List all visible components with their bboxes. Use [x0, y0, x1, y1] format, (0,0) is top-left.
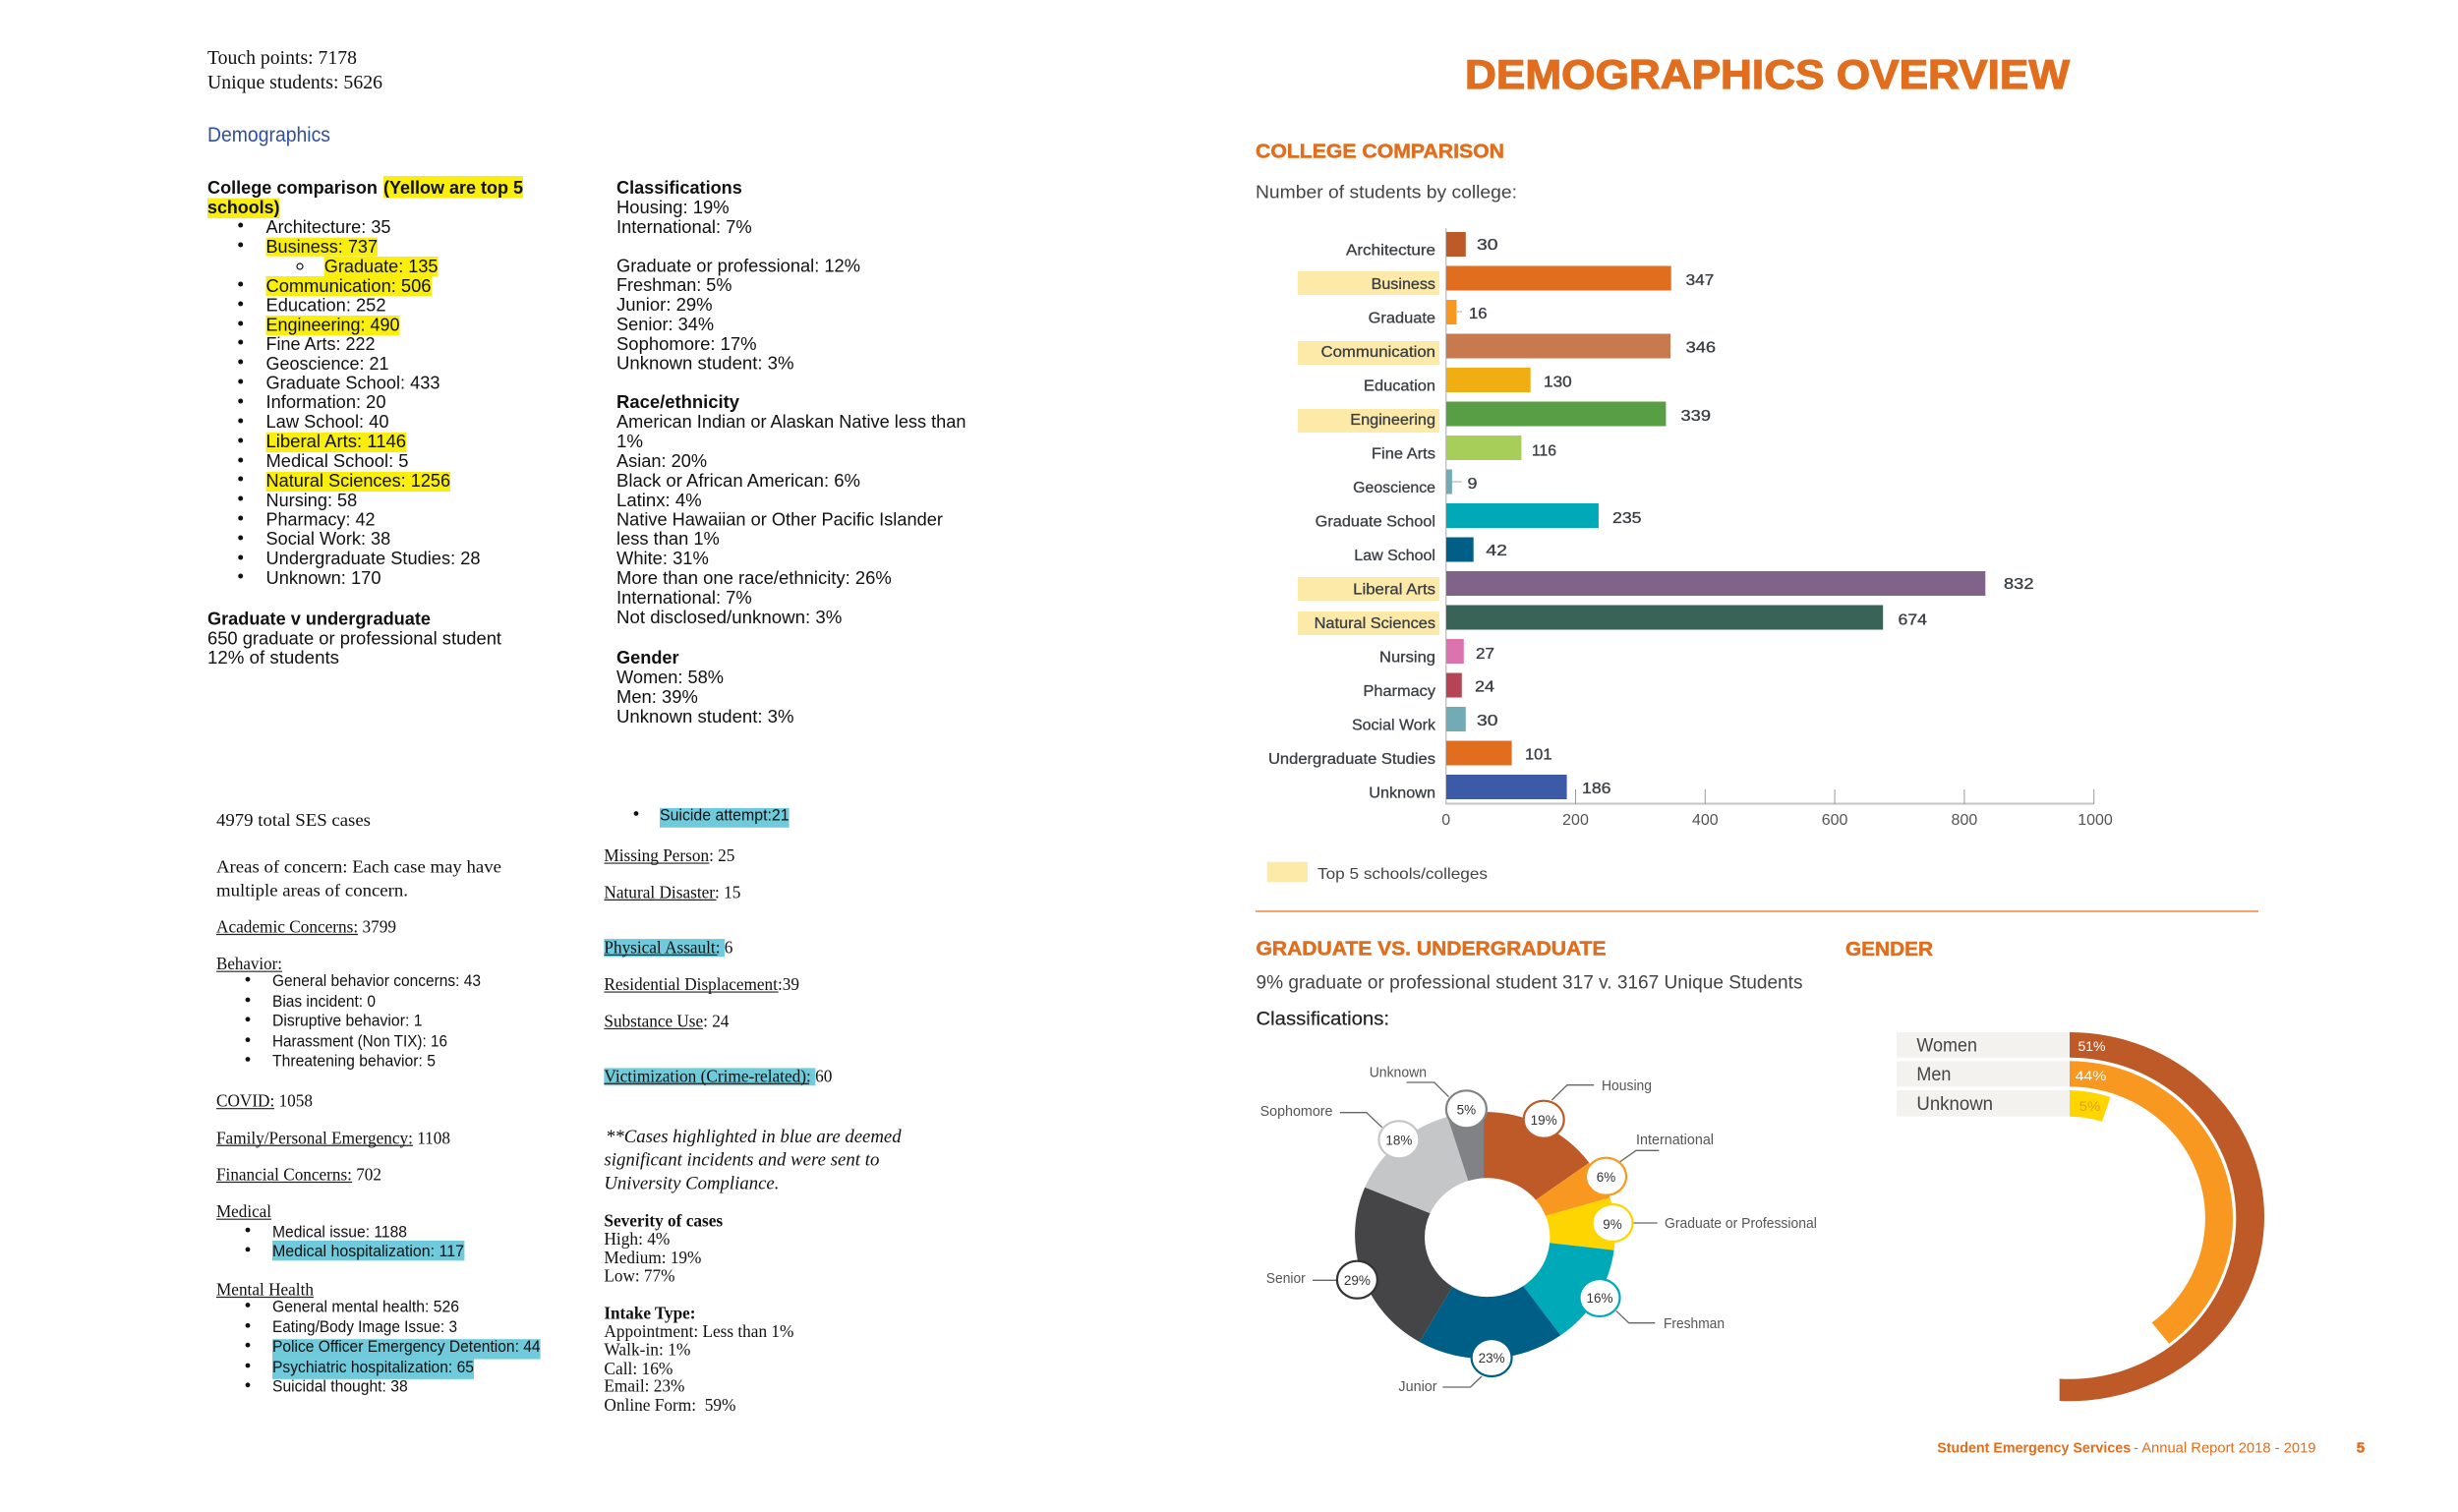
category labels: Pharmacy — [1363, 683, 1435, 700]
value labels: 674 — [1898, 612, 1927, 629]
panel: SES cases left column: Disruptive behavior: 1 — [272, 1012, 423, 1030]
text block: graduate v undergraduate: Graduate v undergraduate — [207, 610, 431, 629]
value labels: 16 — [1469, 306, 1488, 322]
percentage values: 23% — [1479, 1351, 1505, 1366]
percentage values: 18% — [1385, 1133, 1412, 1148]
slice labels: Graduate or Professional — [1665, 1216, 1817, 1232]
category labels: Graduate — [1369, 311, 1435, 326]
panel: SES cases right column: Substance Use: 24 — [604, 1012, 729, 1030]
row labels: Women — [1916, 1036, 1977, 1056]
panel: college comparison notes: Unknown: 170 — [265, 568, 381, 588]
text block: classifications: Sophomore: 17% — [616, 334, 757, 354]
panel: SES cases left column: Behavior: — [216, 954, 282, 973]
panel: college comparison notes: (Yellow are top 5 — [383, 178, 523, 198]
panel: SES cases left column: COVID: 1058 — [216, 1091, 313, 1111]
category labels: Natural Sciences — [1315, 615, 1435, 632]
slice labels: Unknown — [1370, 1066, 1427, 1081]
panel: SES cases right column: Residential Displacement:39 — [604, 974, 799, 994]
text block: classifications: International: 7% — [616, 217, 752, 237]
value labels: 235 — [1612, 510, 1642, 527]
axis tick labels: 600 — [1822, 812, 1848, 829]
text block: gender notes: Unknown student: 3% — [616, 707, 794, 727]
panel: SES cases left column: Financial Concerns: 702 — [216, 1165, 381, 1184]
panel: SES cases right column: Low: 77% — [604, 1265, 674, 1285]
axis tick labels: 200 — [1562, 812, 1589, 829]
subheading: number of students: Number of students by college: — [1256, 183, 1517, 203]
category labels: Architecture — [1346, 242, 1435, 260]
axis tick labels: 400 — [1692, 812, 1719, 829]
donut chart: classifications — [1260, 1066, 1817, 1395]
axis tick labels — [1441, 812, 2113, 829]
category labels: Undergraduate Studies — [1268, 751, 1435, 768]
text block: race and ethnicity: Black or African American: 6% — [616, 471, 860, 491]
text block: classifications: Junior: 29% — [616, 295, 713, 315]
panel: SES cases right column: Call: 16% — [604, 1359, 673, 1378]
footer: - Annual Report 2018 - 2019 — [2134, 1439, 2316, 1457]
panel: college comparison notes: Architecture: 35 — [265, 217, 391, 237]
panel: SES cases right column: Walk-in: 1% — [604, 1340, 690, 1360]
footer — [1937, 1439, 2365, 1457]
panel: college comparison notes: Graduate: 135 — [324, 257, 438, 276]
text block: classifications: Unknown student: 3% — [616, 354, 794, 374]
heading: graduate vs undergraduate: GRADUATE VS. UNDERGRADUATE — [1257, 939, 1607, 960]
text block: race and ethnicity: less than 1% — [616, 529, 720, 549]
category labels: Social Work — [1352, 718, 1435, 733]
panel: SES cases right column: Suicide attempt:21 — [660, 806, 790, 824]
value labels: 130 — [1544, 375, 1572, 391]
panel: college comparison notes: Pharmacy: 42 — [265, 509, 376, 529]
category labels: Education — [1364, 378, 1435, 395]
text block: race and ethnicity: International: 7% — [616, 588, 752, 608]
panel: SES cases left column: Suicidal thought: 38 — [272, 1377, 408, 1396]
panel: SES cases right column: Email: 23% — [604, 1376, 684, 1396]
panel: SES cases left column — [216, 810, 541, 1396]
bar chart: students by college — [1268, 228, 2113, 829]
panel: SES cases right column: University Compliance. — [604, 1173, 779, 1193]
leader lines — [1313, 1082, 1659, 1387]
text block: classifications — [616, 178, 860, 374]
panel: SES cases left column: Bias incident: 0 — [272, 992, 376, 1011]
category labels: Liberal Arts — [1353, 582, 1435, 598]
value labels: 30 — [1477, 713, 1498, 729]
category labels: Business — [1372, 276, 1435, 293]
value labels: 101 — [1525, 747, 1552, 764]
panel: college comparison notes: Undergraduate Studies: 28 — [265, 549, 480, 568]
percentage values — [1344, 1103, 1622, 1366]
text block: race and ethnicity: Race/ethnicity — [616, 392, 739, 412]
text block: classifications: Classifications — [616, 178, 742, 198]
value labels: 347 — [1686, 272, 1714, 289]
panel: college comparison notes: Nursing: 58 — [265, 491, 357, 510]
panel: totals: Unique students: 5626 — [207, 72, 382, 93]
panel: SES cases left column: Medical issue: 1188 — [272, 1223, 407, 1242]
row percentages — [2076, 1038, 2106, 1114]
panel: SES cases left column: Harassment (Non TIX): 16 — [272, 1032, 447, 1051]
value labels: 116 — [1532, 443, 1556, 460]
text block: race and ethnicity: Not disclosed/unknown: 3% — [616, 608, 842, 627]
panel: SES cases left column: 4979 total SES cases — [216, 810, 371, 830]
slice labels: Sophomore — [1260, 1104, 1333, 1120]
category labels: Graduate School — [1316, 513, 1435, 531]
panel: college comparison notes: College comparison — [207, 178, 378, 198]
arc: women — [2060, 1032, 2264, 1401]
row percentages: 44% — [2076, 1068, 2106, 1083]
percentage values: 9% — [1603, 1217, 1622, 1232]
panel: SES cases left column: Threatening behavior: 5 — [272, 1051, 436, 1070]
panel: SES cases left column: multiple areas of concern. — [216, 880, 408, 900]
row labels: Men — [1916, 1065, 1951, 1085]
panel: college comparison notes: Education: 252 — [265, 295, 385, 315]
value labels: 186 — [1582, 781, 1611, 797]
axis tick labels: 800 — [1952, 812, 1977, 829]
percentage bubbles — [1337, 1090, 1632, 1376]
text block: race and ethnicity: Native Hawaiian or Other Pacific Islander — [616, 509, 943, 529]
category labels: Law School — [1354, 548, 1435, 564]
text block: race and ethnicity: Latinx: 4% — [616, 491, 702, 510]
category labels: Unknown — [1369, 785, 1435, 802]
value labels: 9 — [1467, 476, 1478, 493]
value labels: 346 — [1686, 340, 1716, 357]
value labels: 30 — [1477, 237, 1498, 254]
text block: classifications: Senior: 34% — [616, 315, 714, 334]
panel: SES cases left column: Mental Health — [216, 1280, 314, 1300]
panel: SES cases left column: Family/Personal Emergency: 1108 — [216, 1128, 450, 1147]
heading: Demographics: Demographics — [207, 124, 330, 146]
text block: gender notes: Women: 58% — [616, 668, 724, 687]
heading: gender: GENDER — [1845, 939, 1934, 960]
panel: college comparison notes: Graduate School: 433 — [265, 374, 440, 393]
row labels: Unknown — [1916, 1094, 1993, 1115]
axis tick labels: 0 — [1441, 812, 1450, 829]
subheading: classifications: Classifications: — [1257, 1010, 1389, 1030]
text: graduate percentage: 9% graduate or professional student 317 v. 3167 Unique Students — [1257, 973, 1803, 994]
text block: race and ethnicity: Asian: 20% — [616, 451, 707, 471]
panel: SES cases left column: General behavior concerns: 43 — [272, 971, 481, 990]
panel: SES cases right column: Natural Disaster: 15 — [604, 882, 740, 901]
title: DEMOGRAPHICS OVERVIEW — [1465, 51, 2070, 97]
text block: graduate v undergraduate — [207, 610, 501, 668]
panel: SES cases left column: Academic Concerns: 3799 — [216, 917, 396, 937]
text block: classifications: Graduate or professional: 12% — [616, 256, 860, 275]
panel: college comparison notes: Communication: 506 — [265, 276, 431, 296]
row labels — [1916, 1036, 1993, 1115]
footer: 5 — [2357, 1439, 2365, 1457]
panel: SES cases right column: Medium: 19% — [604, 1248, 701, 1267]
category labels: Engineering — [1350, 412, 1435, 429]
panel: college comparison notes — [207, 176, 523, 588]
panel: college comparison notes: Business: 737 — [265, 237, 378, 257]
panel: college comparison notes: Social Work: 38 — [265, 529, 390, 549]
panel: totals: Touch points: 7178 — [207, 47, 357, 69]
row percentages: 5% — [2079, 1098, 2100, 1114]
panel: SES cases right column: Severity of cases — [604, 1211, 723, 1230]
percentage values: 19% — [1531, 1113, 1557, 1128]
legend: top 5 schools: Top 5 schools/colleges — [1317, 866, 1488, 883]
panel: SES cases left column: Medical hospitalization: 117 — [272, 1242, 464, 1260]
slice labels: Housing — [1602, 1078, 1652, 1094]
category labels: Communication — [1321, 344, 1435, 361]
panel: SES cases left column: Psychiatric hospitalization: 65 — [272, 1358, 474, 1376]
panel: college comparison notes: Information: 20 — [265, 392, 385, 412]
panel: SES cases left column: Areas of concern: Each case may have — [216, 857, 501, 876]
text block: gender notes: Gender — [616, 648, 679, 668]
category labels: Fine Arts — [1372, 446, 1435, 462]
slice labels: Senior — [1266, 1271, 1306, 1287]
percentage values: 29% — [1344, 1273, 1371, 1288]
value labels: 339 — [1681, 408, 1711, 425]
text block: graduate v undergraduate: 12% of students — [207, 648, 339, 668]
percentage values: 6% — [1597, 1170, 1615, 1185]
panel: SES cases right column: Victimization (Crime-related): 60 — [604, 1066, 832, 1086]
panel: college comparison notes: schools) — [207, 198, 280, 217]
footer: Student Emergency Services — [1937, 1439, 2131, 1457]
radial bar chart: gender — [1897, 1032, 2264, 1401]
top 5 label highlights — [1298, 271, 1439, 635]
heading: college comparison: COLLEGE COMPARISON — [1256, 142, 1504, 163]
panel: SES cases right column: **Cases highlighted in blue are deemed — [606, 1127, 902, 1147]
donut wedges — [1355, 1112, 1615, 1359]
row backgrounds — [1897, 1032, 2070, 1117]
panel: SES cases left column: Police Officer Emergency Detention: 44 — [272, 1337, 541, 1356]
axis tick labels: 1000 — [2078, 812, 2113, 829]
slice labels: Freshman — [1664, 1316, 1725, 1332]
panel: college comparison notes: Geoscience: 21 — [265, 354, 389, 374]
legend: top 5 schools — [1267, 862, 1488, 883]
text block: gender notes — [616, 648, 794, 727]
value labels: 24 — [1475, 679, 1494, 696]
value labels: 27 — [1476, 646, 1494, 663]
category labels: Nursing — [1379, 649, 1435, 667]
panel: SES cases left column: Eating/Body Image Issue: 3 — [272, 1317, 457, 1336]
text block: race and ethnicity: More than one race/ethnicity: 26% — [616, 568, 892, 588]
category labels: Geoscience — [1353, 480, 1435, 496]
panel: SES cases right column — [604, 806, 902, 1415]
value labels — [1467, 237, 2034, 797]
panel: college comparison notes: Law School: 40 — [265, 412, 389, 432]
panel: totals — [207, 47, 382, 93]
text block: classifications: Freshman: 5% — [616, 275, 732, 295]
arc: men — [2070, 1061, 2233, 1344]
percentage values: 16% — [1586, 1291, 1613, 1306]
value labels: 832 — [2004, 576, 2034, 593]
bars — [1446, 232, 1985, 799]
panel: SES cases right column: Missing Person: 25 — [604, 845, 734, 865]
panel: SES cases right column: Intake Type: — [604, 1303, 695, 1322]
panel: SES cases right column: Online Form: 59% — [604, 1395, 735, 1415]
panel: college comparison notes: Engineering: 490 — [265, 315, 399, 334]
slice labels: International — [1636, 1133, 1714, 1148]
panel: SES cases right column: High: 4% — [604, 1229, 670, 1249]
text block: classifications: Housing: 19% — [616, 198, 730, 217]
panel: college comparison notes: Fine Arts: 222 — [265, 334, 376, 354]
text block: race and ethnicity — [616, 392, 966, 627]
panel: SES cases right column: significant incidents and were sent to — [604, 1150, 879, 1171]
slice labels: Junior — [1398, 1379, 1437, 1395]
panel: college comparison notes: Medical School: 5 — [265, 451, 409, 471]
text block: race and ethnicity: 1% — [616, 432, 643, 451]
percentage values: 5% — [1457, 1103, 1476, 1117]
panel: college comparison notes: Liberal Arts: 1146 — [265, 432, 406, 451]
panel: SES cases right column: Appointment: Less than 1% — [604, 1321, 793, 1341]
text block: race and ethnicity: White: 31% — [616, 549, 709, 568]
panel: SES cases left column: Medical — [216, 1201, 271, 1221]
slice labels — [1260, 1066, 1817, 1395]
arc: unknown — [2070, 1090, 2110, 1122]
text block: graduate v undergraduate: 650 graduate or professional student — [207, 629, 501, 649]
text block: gender notes: Men: 39% — [616, 687, 698, 707]
row percentages: 51% — [2078, 1038, 2106, 1054]
category labels — [1268, 242, 1435, 802]
panel: SES cases right column: Physical Assault: 6 — [604, 937, 732, 957]
panel: SES cases left column: General mental health: 526 — [272, 1297, 459, 1315]
value labels: 42 — [1486, 543, 1507, 559]
panel: college comparison notes: Natural Sciences: 1256 — [265, 471, 450, 491]
axis — [1446, 228, 2094, 804]
text block: race and ethnicity: American Indian or Alaskan Native less than — [616, 412, 966, 432]
